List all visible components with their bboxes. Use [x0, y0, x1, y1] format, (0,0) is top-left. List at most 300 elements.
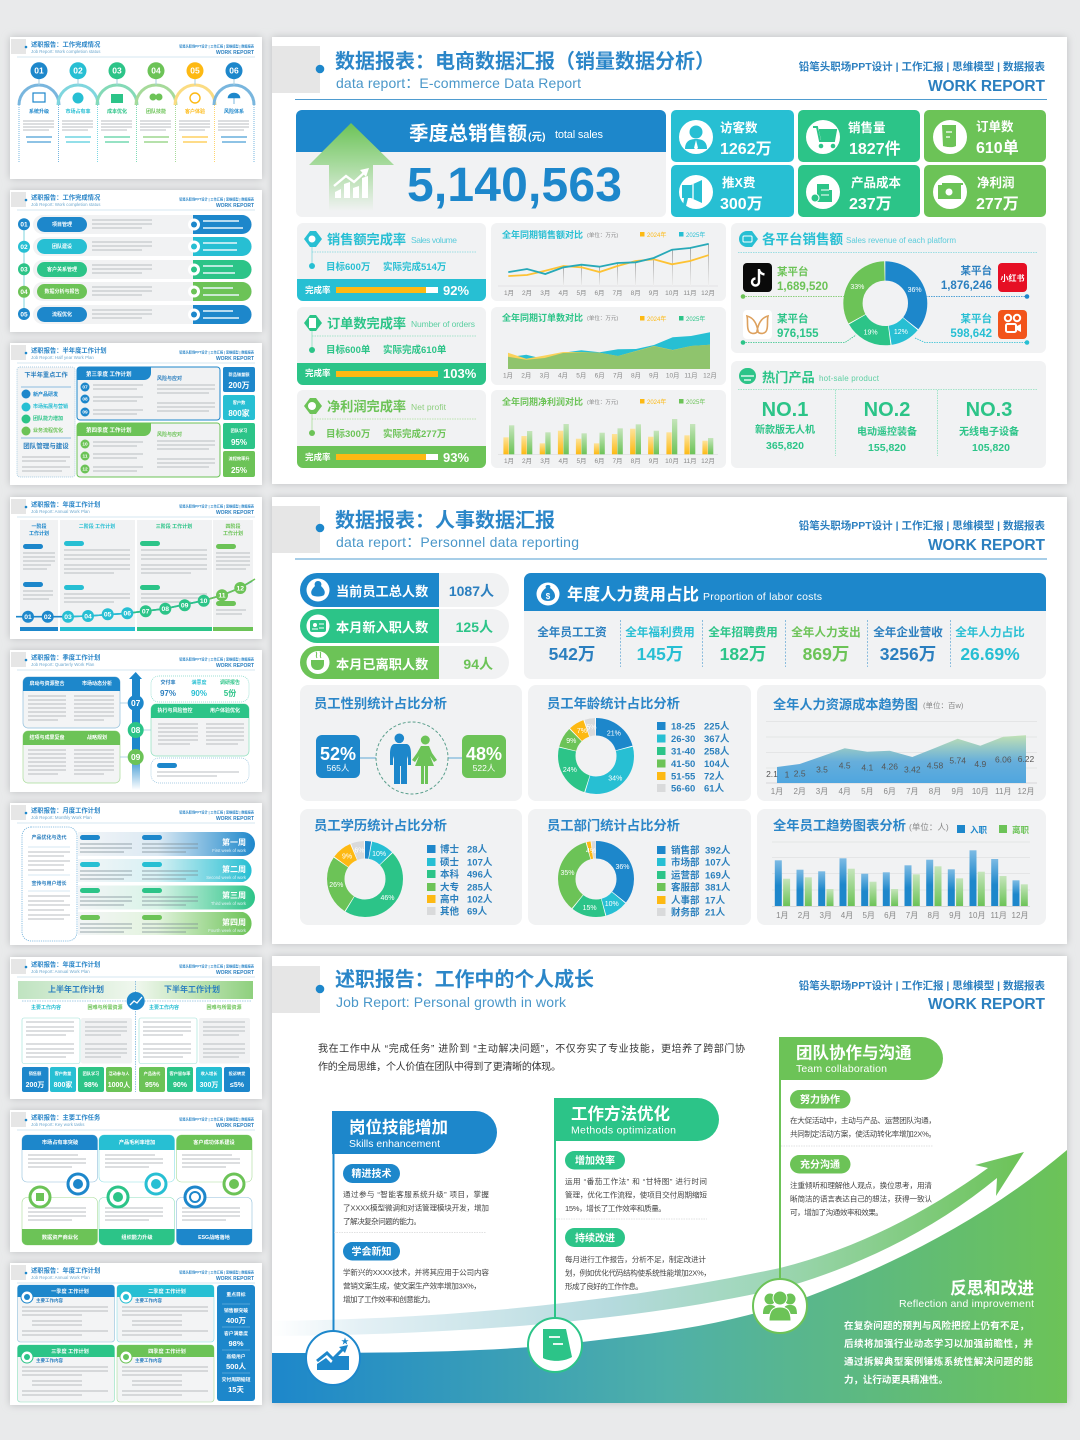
thumbnail: work completion arcs: 02: [73, 66, 83, 76]
panel: employee trend: 全年员工趋势图表分析: [773, 817, 906, 833]
donut chart: age: 24%: [563, 767, 577, 774]
legend: department: 运营部: [671, 870, 700, 882]
brand tagline: 铅笔头职场PPT设计 | 工作汇报 | 思维模型 | 数据报表: [799, 519, 1045, 532]
area chart: orders: 6月: [595, 372, 605, 380]
thumbnail: monthly plan: 产品优化与迭代: [31, 834, 67, 841]
thumbnail: monthly plan: Third week of work: [211, 901, 247, 906]
donut chart: department: 36%: [615, 864, 630, 871]
line chart: sales: 2025年: [686, 231, 705, 239]
line chart: sales: 全年同期销售额对比: [502, 229, 583, 240]
panel: employee trend: 10月: [969, 911, 985, 920]
bar chart: profit: 2025年: [686, 398, 705, 406]
donut chart: department: 15%: [583, 905, 597, 912]
thumbnail: annual plan quarters: 主要工作内容: [135, 1297, 162, 1304]
thumbnail: annual timeline: 07: [142, 609, 150, 616]
thumbnail: work completion arcs: 系统升级: [29, 108, 49, 115]
legend: age: 18-25: [671, 722, 696, 732]
thumbnail: annual timeline: 述职报告：年度工作计划: [31, 500, 100, 508]
thumbnail: work completion rows: 项目管理: [52, 221, 72, 228]
panel: HR cost trend: 4月: [838, 787, 851, 796]
icon: money bag: $: [546, 592, 551, 601]
KPI cards: 产品成本: [851, 175, 902, 190]
panel: employee trend: 入职: [970, 825, 988, 835]
block: reflection: 后续将加强行业动态学习以加强前瞻性，并: [844, 1338, 1033, 1350]
donut chart: education: 26%: [329, 882, 343, 889]
thumbnail: quarterly plan: 执行与风险管控: [157, 707, 193, 714]
legend: department: 客服部: [671, 882, 700, 894]
column: teamwork: 共同制定活动方案，使活动转化率增加2X%。: [790, 1128, 936, 1138]
KPI cards: 300万: [720, 196, 763, 213]
thumbnail: annual plan two halves: 销售额: [29, 1070, 42, 1077]
panel: employee trend: [757, 809, 1046, 925]
panel: platform sales: 某平台: [960, 312, 992, 325]
tag: efficiency: 增加效率: [575, 1154, 615, 1167]
column: skills: [332, 1111, 497, 1336]
thumbnail: work completion arcs: 03: [112, 66, 122, 76]
panel: HR cost trend: 5.74: [949, 756, 966, 766]
thumbnail: half year plan: 团队能力增加: [33, 415, 63, 422]
panel: gender: 522人: [473, 763, 496, 773]
total number: 5,140,563: [407, 159, 622, 212]
icon: team circle: [753, 1279, 807, 1333]
tag: advance skills: 精进技术: [352, 1167, 392, 1180]
column: skills: 营销文案生成，使文案生产效率增加3X%，: [343, 1280, 481, 1290]
panel: HR cost trend: 12月: [1018, 787, 1034, 796]
panel: profit completion: 目标300万: [326, 428, 370, 440]
thumbnail: annual plan quarters: WORK REPORT: [216, 1276, 254, 1282]
icon: xiaohongshu: [998, 263, 1027, 292]
panel: gender: 48%: [466, 744, 502, 764]
thumbnail: work completion rows: 05: [20, 311, 28, 318]
panel: employee trend: 9月: [949, 911, 962, 920]
bar chart: profit: 全年同期净利润对比: [502, 396, 583, 407]
legend: age: 258人: [704, 746, 730, 758]
thumbnail: annual plan quarters: 三季度 工作计划: [51, 1347, 89, 1355]
thumbnail: annual plan two halves: 200万: [26, 1081, 44, 1089]
legend: age: 56-60: [671, 784, 695, 794]
donut chart: platform share: 12%: [894, 329, 908, 336]
block: reflection: [844, 1279, 1034, 1386]
stat: departures: 94人: [463, 656, 493, 672]
bar chart: profit: [491, 390, 726, 468]
panel: hot products: hot-sale product: [819, 374, 880, 383]
donut chart: education: 9%: [342, 854, 352, 860]
panel: department: 员工部门统计占比分析: [547, 817, 680, 833]
legend: education: 496人: [467, 870, 493, 880]
thumbnail: monthly plan: 第一周: [222, 837, 246, 847]
title: 数据报表：人事数据汇报: [335, 509, 555, 532]
legend: education: 博士: [440, 844, 460, 856]
block: reflection: 反思和改进: [950, 1279, 1034, 1298]
brand english: WORK REPORT: [928, 78, 1046, 95]
thumbnail: work completion arcs: Job Report: Work completion status: [31, 49, 101, 54]
donut chart: age: 9%: [566, 738, 576, 745]
column: methods: 管理，优化工作流程，使项目交付周期缩短: [565, 1190, 707, 1200]
thumbnail: annual plan two halves: [10, 957, 262, 1099]
legend: department: 21人: [705, 908, 726, 918]
bar chart: profit: 6月: [594, 457, 605, 465]
donut chart: department: 10%: [605, 901, 619, 908]
thumbnail: work completion arcs: 成本优化: [107, 108, 127, 115]
thumbnail: work completion arcs: 铅笔头职场PPT设计 | 工作汇报 | 思维模型 | 数据报表: [179, 44, 255, 48]
growth arrow: [272, 1152, 1024, 1336]
thumbnail: key tasks: 市场占有率突破: [42, 1138, 79, 1146]
legend: age: 26-30: [671, 734, 695, 745]
thumbnail: annual plan quarters: 主要工作内容: [36, 1357, 63, 1364]
line chart: sales: 1月: [504, 289, 514, 297]
thumbnail: annual plan two halves: 述职报告：年度工作计划: [31, 960, 100, 968]
thumbnail: half year plan: 第四季度 工作计划: [86, 426, 132, 434]
thumbnail: quarterly plan: 满意度: [191, 679, 207, 686]
area chart: orders: 11月: [684, 372, 698, 380]
bar chart: profit: 2月: [522, 457, 532, 465]
tag: continuous improvement: [565, 1228, 625, 1247]
legend: department: 人事部: [671, 894, 700, 906]
panel: HR cost trend: 4.58: [927, 761, 944, 771]
panel: hot products: 155,820: [868, 442, 906, 454]
thumbnail: quarterly plan: [10, 650, 262, 792]
line chart: sales: 10月: [665, 289, 679, 297]
thumbnail: work completion arcs: [10, 37, 262, 179]
subtitle: Job Report: Personal growth in work: [336, 994, 567, 1010]
intro text: [318, 1042, 745, 1073]
panel: HR cost trend: 4.5: [839, 761, 851, 771]
thumbnail: annual plan two halves: 投诉转发: [229, 1070, 246, 1077]
donut chart: platform share: 19%: [864, 330, 878, 336]
thumbnail: annual timeline: 一阶段: [31, 523, 47, 530]
column: methods: Methods optimization: [571, 1124, 676, 1136]
legend: age: 367人: [704, 734, 730, 745]
block: reflection: Reflection and improvement: [899, 1298, 1034, 1310]
panel: orders completion: 订单数完成率: [327, 315, 406, 331]
panel: hot products: 新款版无人机: [755, 423, 815, 436]
thumbnail: half year plan: 12: [82, 467, 88, 473]
panel: gender: 565人: [327, 763, 350, 773]
area chart: orders: 10月: [666, 372, 680, 380]
area chart: orders: 全年同期订单数对比: [502, 312, 583, 323]
thumbnail: annual timeline: 工作计划: [223, 530, 243, 537]
donut chart: age: [563, 724, 625, 785]
panel: hot products: 365,820: [766, 440, 804, 452]
icon: megaphone: [679, 175, 713, 209]
thumbnail: half year plan: 流程效率升: [229, 455, 249, 462]
line chart: sales: 4月: [558, 289, 569, 297]
donut chart: education: 46%: [380, 895, 395, 902]
KPI cards: 237万: [849, 196, 892, 213]
tag: collaboration: 努力协作: [800, 1093, 840, 1106]
bar chart: profit: 4月: [558, 457, 569, 465]
subtitle: data report：E-commerce Data Report: [336, 75, 581, 91]
thumbnail: key tasks: 铅笔头职场PPT设计 | 工作汇报 | 思维模型 | 数据报表: [179, 1116, 255, 1122]
thumbnail: half year plan: WORK REPORT: [216, 356, 254, 362]
column: teamwork: 在大促活动中，主动与产品、运营团队沟通，: [790, 1115, 936, 1125]
column: skills: 了XXXX模型微调和对话管理模块开发，增加: [343, 1202, 489, 1212]
icon: xiaohongshu: 小红书: [1000, 273, 1024, 283]
thumbnail: annual plan two halves: 90%: [173, 1082, 188, 1089]
legend: age: 31-40: [671, 746, 695, 758]
thumbnail: annual timeline: 工作计划: [29, 530, 49, 537]
panel: profit completion: [297, 390, 486, 468]
panel: profit completion: 完成率: [305, 452, 331, 462]
thumbnail: annual plan quarters: [10, 1263, 262, 1405]
stat: total employees: [300, 573, 509, 607]
line chart: sales: [491, 223, 726, 301]
panel: HR cost trend: 5月: [861, 787, 874, 796]
panel: education: 员工学历统计占比分析: [314, 817, 447, 833]
thumbnail: half year plan: 第三季度 工作计划: [86, 370, 132, 378]
line chart: sales: 2月: [522, 289, 532, 297]
stat: departures: 本月已离职人数: [336, 656, 428, 672]
legend: education: 285人: [467, 882, 493, 894]
panel: labor costs: 26.69%: [960, 644, 1020, 664]
panel: orders completion: 目标600单: [326, 344, 371, 356]
intro text: 我在工作中从 “完成任务” 进阶到 “主动解决问题”，不仅夯实了专业技能，更培养了跨部门协: [318, 1042, 745, 1055]
panel: education: [300, 809, 522, 925]
area chart: orders: 1月: [503, 372, 513, 380]
KPI cards: 访客数: [720, 120, 758, 135]
thumbnail: annual timeline: 11: [218, 593, 226, 600]
panel: orders completion: [297, 307, 486, 385]
donut chart: department: [560, 848, 630, 912]
thumbnail: key tasks: 数据资产商业化: [42, 1233, 79, 1241]
column: methods: 工作方法优化: [571, 1104, 670, 1124]
legend: age: 225人: [704, 722, 730, 732]
tag: collaboration: [790, 1090, 850, 1108]
thumbnail: annual timeline: 08: [162, 606, 169, 613]
panel: sales completion: Sales volume: [411, 235, 457, 245]
thumbnail: annual plan quarters: 述职报告：年度工作计划: [31, 1266, 100, 1274]
legend: age: 104人: [704, 759, 730, 770]
panel: hot products: [731, 361, 1046, 468]
bar chart: profit: 3月: [540, 457, 550, 465]
thumbnail: quarterly plan: 战略规划: [87, 734, 107, 741]
panel: employee trend: 6月: [884, 911, 897, 920]
icon: cost: [806, 175, 840, 209]
panel: labor costs: 年度人力费用占比: [567, 584, 699, 604]
stat: total employees: 当前员工总人数: [336, 583, 428, 599]
thumbnail: key tasks: 组织能力升级: [121, 1233, 153, 1241]
thumbnail: half year plan: 风险与应对: [157, 375, 182, 382]
thumbnail: work completion rows: 04: [20, 289, 28, 296]
legend: department: 107人: [705, 858, 731, 868]
legend: education: [427, 844, 493, 918]
thumbnail: work completion rows: 流程优化: [52, 311, 72, 318]
brand english: WORK REPORT: [928, 537, 1046, 554]
thumbnail: annual plan quarters: 15天: [228, 1385, 244, 1394]
legend: age: 72人: [704, 772, 725, 782]
thumbnail: annual plan quarters: 主要工作内容: [36, 1297, 63, 1304]
thumbnail: half year plan: 客户数: [233, 399, 246, 406]
donut chart: education: [329, 848, 395, 908]
panel: profit completion: Net profit: [411, 402, 447, 412]
legend: education: 69人: [467, 906, 488, 918]
panel: employee trend: 3月: [819, 911, 832, 920]
column: teamwork: [779, 1037, 943, 1282]
thumbnail: monthly plan: 第三周: [222, 890, 246, 900]
stat: new hires: 125人: [456, 619, 493, 635]
panel: platform sales: 598,642: [950, 328, 992, 340]
tag: communication: 充分沟通: [800, 1158, 840, 1171]
thumbnail: key tasks: Job Report: Key work tasks: [31, 1122, 85, 1127]
area chart: orders: 9月: [649, 372, 659, 380]
thumbnail: annual plan two halves: 产品迭代: [144, 1070, 161, 1077]
thumbnail: work completion arcs: 风险体系: [224, 108, 244, 115]
panel: labor costs: 542万: [549, 644, 595, 664]
panel: HR cost trend: 全年人力资源成本趋势图: [773, 696, 918, 712]
thumbnail: work completion arcs: 06: [229, 66, 239, 76]
subtitle: data report：Personnel data reporting: [336, 534, 579, 550]
KPI cards: 订单数: [976, 119, 1014, 134]
panel: labor costs: 869万: [803, 644, 849, 664]
panel: orders completion: Number of orders: [411, 319, 475, 329]
thumbnail: annual plan two halves: 困难与所需资源: [206, 1004, 242, 1011]
thumbnail: annual timeline: 09: [181, 603, 189, 610]
panel: department: [528, 809, 751, 925]
KPI cards: 1827件: [849, 140, 901, 158]
panel: platform sales: [731, 223, 1046, 353]
thumbnail: work completion arcs: 述职报告：工作完成情况: [31, 40, 101, 48]
column: methods: [554, 1098, 719, 1322]
column: skills: 通过参与 “智能客服系统升级” 项目，掌握: [343, 1189, 489, 1199]
thumbnail: work completion arcs: 客户体验: [185, 108, 205, 115]
thumbnail: annual plan two halves: 下半年工作计划: [164, 984, 220, 994]
thumbnail: annual plan quarters: 高级用户: [226, 1353, 246, 1360]
thumbnail: annual timeline: 03: [64, 614, 72, 621]
thumbnail: quarterly plan: 铅笔头职场PPT设计 | 工作汇报 | 思维模型 | 数据报表: [179, 656, 255, 662]
panel: employee trend: 2月: [798, 911, 810, 920]
thumbnail: annual plan quarters: Job Report: Annual Work Plan: [31, 1275, 90, 1280]
area chart: orders: 2月: [521, 372, 531, 380]
line chart: sales: 3月: [540, 289, 550, 297]
brand tagline: 铅笔头职场PPT设计 | 工作汇报 | 思维模型 | 数据报表: [799, 60, 1045, 73]
legend: age: [657, 722, 730, 794]
thumbnail: quarterly plan: 启动与资源整合: [29, 680, 65, 687]
thumbnail: annual plan two halves: 主要工作内容: [149, 1004, 179, 1011]
donut chart: platform share: 36%: [908, 287, 922, 294]
thumbnail: half year plan: 25%: [231, 466, 247, 475]
line chart: sales: (单位：万元): [587, 231, 618, 239]
panel: platform sales: 1,689,520: [777, 281, 828, 293]
panel: sales completion: 92%: [443, 283, 469, 298]
area chart: orders: 2024年: [647, 315, 666, 323]
thumbnail: work completion rows: 01: [20, 222, 28, 229]
thumbnail: annual plan two halves: Job Report: Annual Work Plan: [31, 969, 90, 974]
stat: new hires: [300, 609, 509, 643]
heading: 季度总销售额: [409, 122, 527, 145]
thumbnail: annual timeline: WORK REPORT: [216, 510, 254, 516]
thumbnail: annual timeline: 10: [200, 598, 208, 605]
line chart: sales: 11月: [683, 289, 697, 297]
panel: HR cost trend: 4.26: [881, 762, 898, 772]
thumbnail: monthly plan: Second week of work: [206, 875, 247, 880]
panel: labor costs: 145万: [637, 644, 683, 664]
panel: platform sales: Sales revenue of each platform: [846, 236, 956, 245]
panel: employee trend: 5月: [862, 911, 875, 920]
icon: clipboard: [304, 315, 322, 331]
icon: hot product: [739, 368, 756, 384]
thumbnail: annual plan quarters: 铅笔头职场PPT设计 | 工作汇报 | 思维模型 | 数据报表: [179, 1270, 255, 1274]
thumbnail: annual plan two halves: 客户留存率: [170, 1070, 190, 1077]
icon: order: [933, 120, 967, 154]
column: methods: 运用 “番茄工作法” 和 “甘特图” 进行时间: [565, 1176, 707, 1186]
title: 数据报表：电商数据汇报（销量数据分析）: [335, 50, 715, 73]
panel: employee trend: 12月: [1012, 911, 1028, 920]
thumbnail: work completion rows: 03: [20, 267, 28, 274]
block: reflection: 力，让行动更具精准性。: [844, 1374, 948, 1386]
thumbnail: annual plan two halves: 客户数量: [55, 1070, 71, 1077]
KPI cards: 净利润: [977, 175, 1015, 190]
thumbnail: work completion arcs: 团队技能: [146, 108, 166, 115]
donut chart: platform share: [850, 271, 922, 336]
thumbnail: monthly plan: 第四周: [222, 917, 246, 927]
thumbnail: monthly plan: Job Report: Monthly Work Plan: [31, 815, 92, 820]
thumbnail: half year plan: 07: [82, 385, 88, 391]
thumbnail: half year plan: 业务流程优化: [33, 427, 63, 434]
thumbnail: half year plan: 市场拓展与营销: [33, 403, 68, 410]
legend: education: 大专: [440, 882, 459, 894]
thumbnail: half year plan: 新产品研发: [33, 391, 58, 398]
thumbnail: half year plan: 08: [82, 397, 88, 403]
area chart: orders: 5月: [576, 372, 586, 380]
KPI cards: 销售量: [848, 120, 886, 135]
panel: labor costs: 3256万: [880, 644, 936, 664]
legend: education: 其他: [440, 906, 460, 918]
thumbnail: key tasks: 述职报告：主要工作任务: [31, 1112, 101, 1122]
panel: gender: 52%: [320, 744, 356, 764]
bar chart: profit: 12月: [701, 457, 715, 465]
intro text: 作的全局思维，个人价值在团队中得到了更清晰的体现。: [318, 1060, 561, 1073]
column: methods: 每月进行工作报告，分析不足，制定改进计: [565, 1254, 706, 1264]
KPI cards: [671, 110, 1046, 217]
thumbnail: annual timeline: 04: [84, 613, 92, 620]
panel: HR cost trend: 1: [785, 770, 790, 780]
thumbnail: annual plan two halves: 上半年工作计划: [48, 984, 104, 994]
icon: up arrow with chart: [309, 123, 394, 211]
thumbnail: work completion arcs: 市场占有率: [65, 108, 91, 115]
column: teamwork: 注重倾听和理解他人观点，换位思考，用清: [790, 1180, 932, 1190]
panel: HR cost trend: 6月: [883, 787, 896, 796]
thumbnail: monthly plan: WORK REPORT: [216, 816, 254, 822]
donut chart: department: 35%: [560, 870, 575, 877]
thumbnail: annual timeline: 铅笔头职场PPT设计 | 工作汇报 | 思维模型 | 数据报表: [179, 504, 255, 508]
icon: money bag: [536, 582, 560, 606]
thumbnail: annual timeline: 06: [124, 611, 131, 618]
panel: HR cost trend: [757, 685, 1046, 801]
wave background: [272, 1150, 1067, 1403]
thumbnail: work completion arcs: 04: [151, 66, 161, 76]
panel: labor costs: 全年福利费用: [625, 625, 695, 639]
legend: education: 107人: [467, 858, 493, 868]
panel: hot products: NO.3: [966, 399, 1012, 421]
thumbnail: work completion rows: 述职报告：工作完成情况: [31, 192, 101, 202]
thumbnail: half year plan: 团队管理与建设: [23, 441, 69, 450]
thumbnail: monthly plan: Fourth week of work: [208, 928, 247, 933]
thumbnail: monthly plan: 述职报告：月度工作计划: [31, 806, 100, 814]
panel: HR cost trend: 3.5: [816, 764, 828, 774]
thumbnail: work completion rows: [10, 190, 262, 332]
thumbnail: annual plan two halves: 活动参与人: [109, 1070, 130, 1077]
legend: department: 财务部: [671, 906, 700, 918]
thumbnail: annual timeline: 12: [237, 585, 244, 592]
icon: visitors: [679, 120, 713, 154]
tag: efficiency: [565, 1151, 625, 1170]
thumbnail: quarterly plan: 09: [131, 752, 141, 762]
thumbnail: quarterly plan: 结项与成果复盘: [29, 734, 65, 741]
legend: department: 市场部: [671, 856, 700, 868]
thumbnail: annual timeline: 01: [24, 614, 32, 621]
thumbnail: key tasks: 客户成功体系建设: [193, 1138, 236, 1146]
panel: HR cost trend: 6.22: [1018, 754, 1035, 764]
